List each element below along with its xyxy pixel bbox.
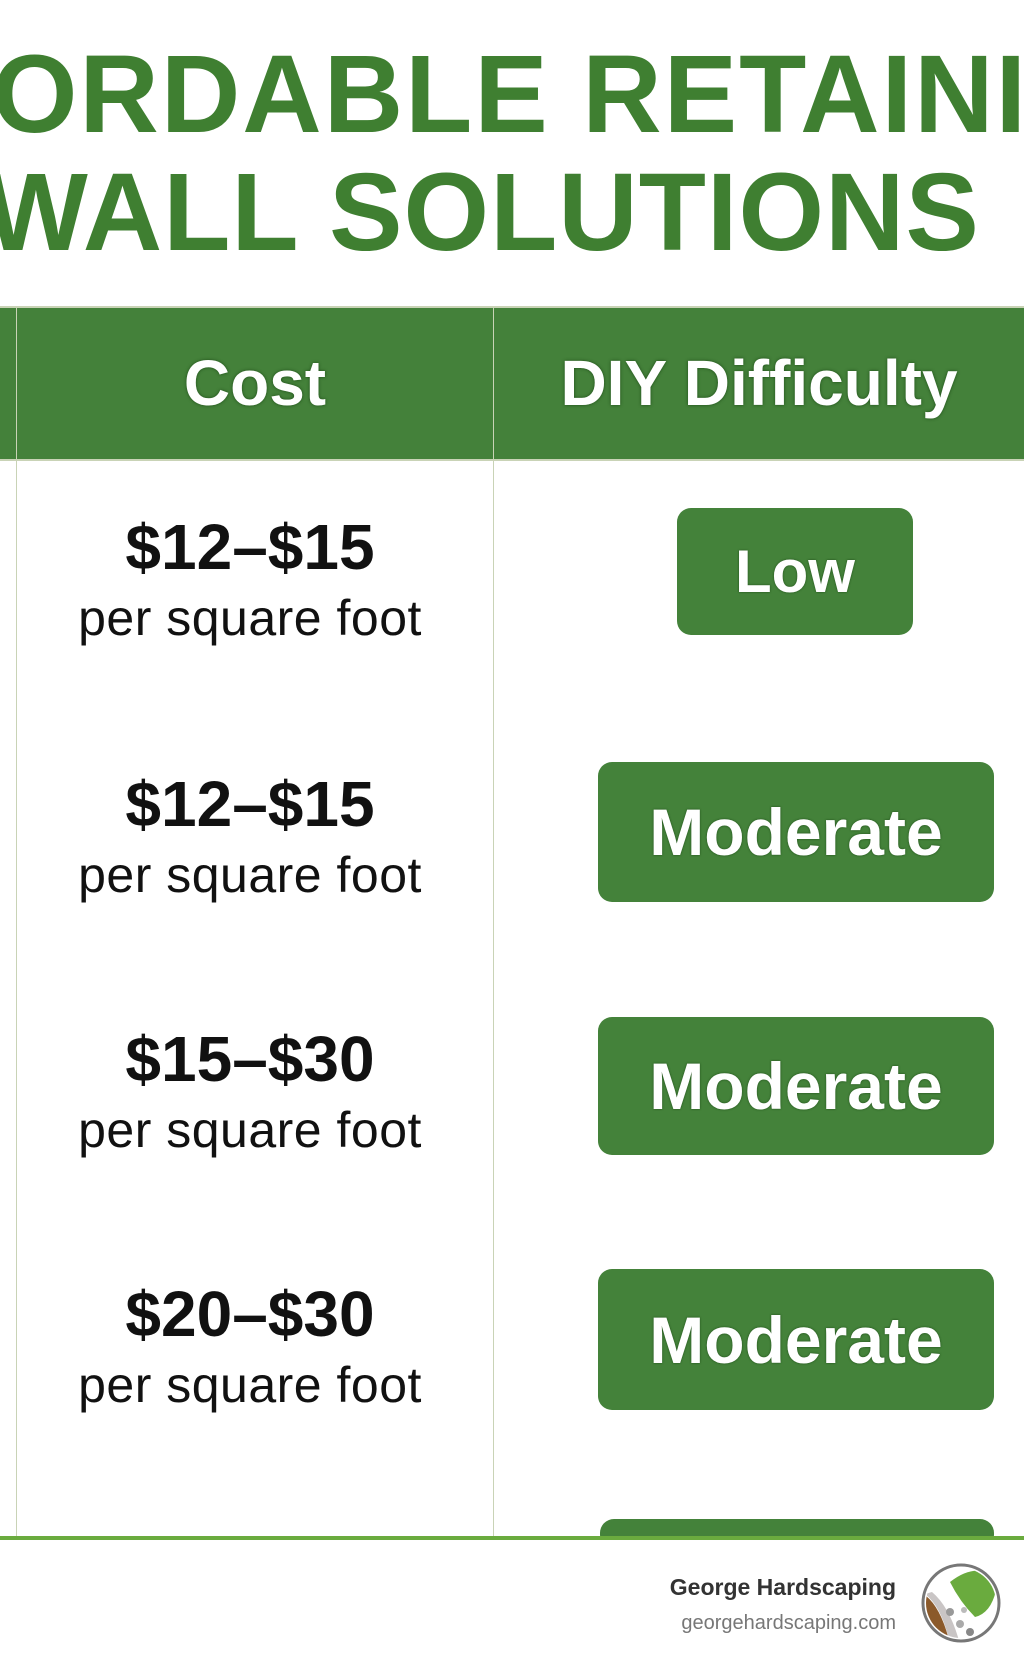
row 2 badge: Moderate <box>649 795 943 869</box>
row 4 cost <box>78 1278 422 1413</box>
row 4 cost: per square foot <box>78 1357 422 1413</box>
row 2 cost <box>78 768 422 903</box>
row 2 badge <box>598 762 994 902</box>
title <box>0 40 1024 260</box>
brand name: George Hardscaping <box>670 1574 896 1600</box>
row 3 cost: $15–$30 <box>125 1023 375 1095</box>
row 3 cost <box>78 1023 422 1158</box>
row 1 badge: Low <box>735 538 855 605</box>
row 4 cost: $20–$30 <box>125 1278 375 1350</box>
row 1 badge <box>677 508 913 635</box>
row 4 badge <box>598 1269 994 1410</box>
row 1 cost: $12–$15 <box>125 511 375 583</box>
table header <box>0 306 1024 461</box>
row 1 cost: per square foot <box>78 590 422 646</box>
header: DIY Difficulty: DIY Difficulty <box>560 347 958 419</box>
row 3 cost: per square foot <box>78 1102 422 1158</box>
icon: logo <box>922 1564 1000 1642</box>
row 1 cost <box>78 511 422 646</box>
row 2 cost: $12–$15 <box>125 768 375 840</box>
row 3 badge: Moderate <box>649 1049 943 1123</box>
row 4 badge: Moderate <box>649 1302 943 1376</box>
row 5 partial badge <box>600 1519 994 1549</box>
row 2 cost: per square foot <box>78 847 422 903</box>
row 3 badge <box>598 1017 994 1155</box>
header: Cost: Cost <box>184 347 326 419</box>
brand url: georgehardscaping.com <box>681 1612 896 1634</box>
footer <box>0 1536 1024 1642</box>
